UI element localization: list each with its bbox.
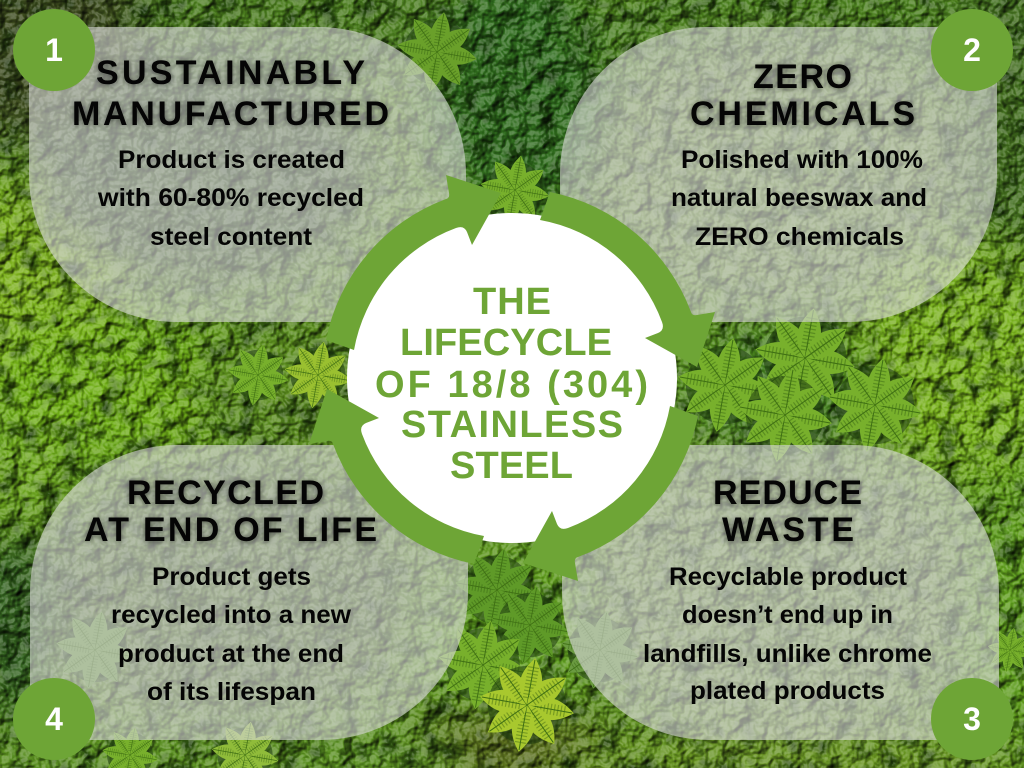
title: the lifecycle of 18/8 (304) stainless steel: LIFECYCLE [400,322,612,364]
panel 2: zero chemicals [560,27,997,322]
arrow: step 4 to step 1 [326,175,501,350]
heading: reduce waste [713,474,862,549]
title: the lifecycle of 18/8 (304) stainless steel: STEEL [450,445,573,487]
text: panel 4 description: product at the end [118,640,344,668]
heading: reduce waste: WASTE [722,511,854,549]
text: panel 2 description: ZERO chemicals [695,223,904,251]
panel 3: reduce waste [562,445,999,740]
heading: recycled at end of life: AT END OF LIFE [84,511,377,549]
text: panel 4 description [111,563,352,706]
heading: reduce waste: REDUCE [713,474,862,512]
title: the lifecycle of 18/8 (304) stainless steel [375,281,648,487]
title: the lifecycle of 18/8 (304) stainless steel: OF 18/8 (304) [375,364,648,406]
text: panel 1 description [97,146,364,251]
text: panel 3 description: Recyclable product [669,563,908,591]
text: panel 1 description: Product is created [118,146,345,174]
text: panel 3 description: landfills, unlike chrome [643,640,932,668]
number badge 1: 1 [45,32,63,68]
number badge 1 [13,9,95,91]
number badge 2 [931,9,1013,91]
number badge 4 [13,678,95,760]
text: panel 2 description: Polished with 100% [681,146,923,174]
arrow: step 3 to step 4 [309,389,484,564]
text: panel 3 description [643,563,932,705]
cycle arrows ring [309,175,715,581]
title: the lifecycle of 18/8 (304) stainless steel: STAINLESS [401,404,623,446]
panel 1: sustainably manufactured [29,27,466,322]
text: panel 4 description: recycled into a new [111,601,352,629]
text: panel 3 description: doesn’t end up in [682,601,893,629]
center white circle [347,213,677,543]
number badge 2: 2 [963,32,981,68]
heading: zero chemicals [690,58,915,133]
heading: zero chemicals: ZERO [753,58,852,96]
arrow: step 2 to step 3 [523,406,698,581]
number badge 4: 4 [45,701,63,737]
panel 4: recycled at end of life [30,445,468,740]
text: panel 1 description: with 60-80% recycled [97,184,364,212]
text: panel 4 description: of its lifespan [147,678,316,706]
text: panel 1 description: steel content [150,223,313,251]
heading: sustainably manufactured [72,54,389,133]
number badge 3 [931,678,1013,760]
number badge 3: 3 [963,701,981,737]
title: the lifecycle of 18/8 (304) stainless steel: THE [473,281,551,323]
heading: sustainably manufactured: SUSTAINABLY [96,54,365,92]
text: panel 2 description [671,146,927,251]
heading: zero chemicals: CHEMICALS [690,95,915,133]
heading: sustainably manufactured: MANUFACTURED [72,95,389,133]
heading: recycled at end of life: RECYCLED [127,474,324,512]
text: panel 3 description: plated products [690,677,885,705]
text: panel 2 description: natural beeswax and [671,184,927,212]
text: panel 4 description: Product gets [152,563,311,591]
arrow: step 1 to step 2 [540,192,715,367]
heading: recycled at end of life [84,474,377,549]
